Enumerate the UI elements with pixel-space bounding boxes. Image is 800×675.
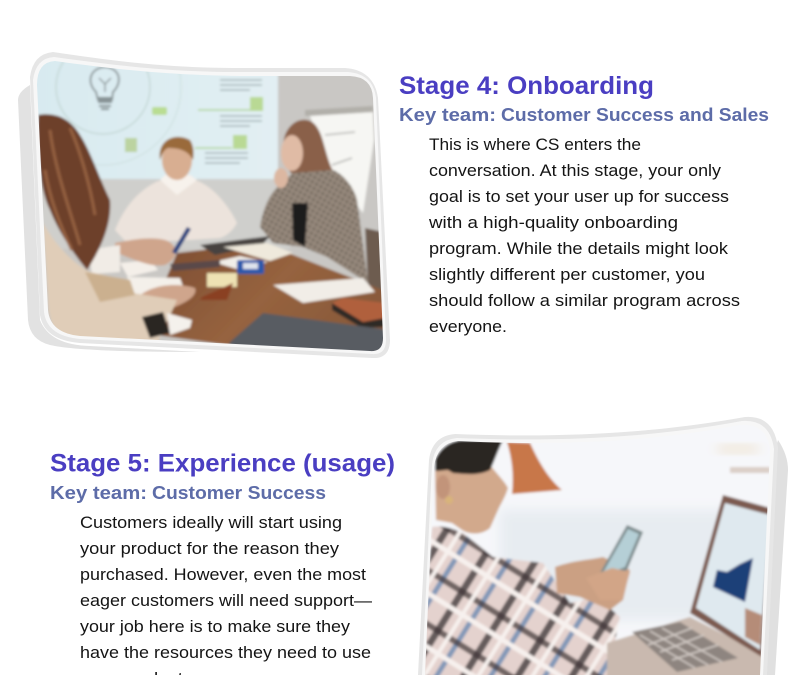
text block: Stage 4 description: should follow a similar program across [429, 292, 740, 310]
text block: Stage 5 description: your job here is to make sure they [80, 618, 351, 636]
text block: Stage 4 description [428, 136, 740, 336]
key team: Stage 5: Customer Success [152, 482, 326, 503]
photo: woman using phone beside laptop [418, 417, 788, 675]
text block: Stage 4 description: slightly different per customer, you [429, 266, 705, 284]
key team: Stage 5: Key team: [50, 482, 147, 503]
key team: Stage 4 [399, 104, 769, 125]
text block: Stage 4 description: with a high-quality onboarding [428, 214, 678, 232]
text block: Stage 4 description: This is where CS enters the [429, 136, 641, 154]
key team: Stage 4: Customer Success and Sales [501, 104, 769, 125]
text block: Stage 4 description: program. While the details might look [429, 240, 729, 258]
text block: Stage 5 description: your product for the reason they [80, 540, 340, 558]
heading: Stage 4: Stage 4: Onboarding [399, 72, 654, 100]
key team: Stage 4: Key team: [399, 104, 496, 125]
text block: Stage 5 description: purchased. However, even the most [80, 566, 366, 584]
photo: team meeting around a table [18, 52, 390, 358]
text block: Stage 5 description: eager customers will need support— [80, 592, 373, 610]
heading: Stage 5: Stage 5: Experience (usage) [50, 450, 395, 478]
text block: Stage 5 description: have the resources they need to use [80, 644, 371, 662]
key team: Stage 5 [50, 482, 326, 503]
text block: Stage 4 description: goal is to set your user up for success [429, 188, 729, 206]
text block: Stage 5 description [80, 514, 373, 675]
text block: Stage 5 description: Customers ideally will start using [80, 514, 342, 532]
text block: Stage 4 description: conversation. At this stage, your only [429, 162, 722, 180]
text block: Stage 4 description: everyone. [429, 318, 507, 336]
